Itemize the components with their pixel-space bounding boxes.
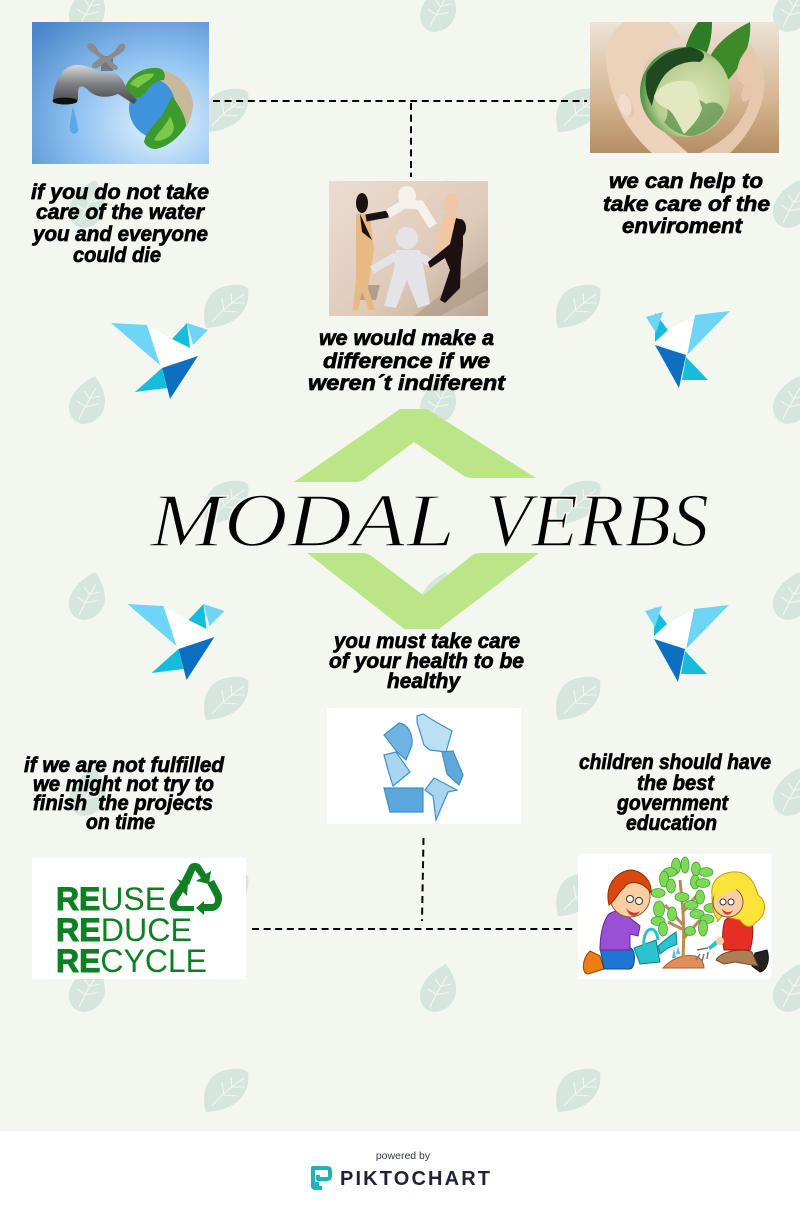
caption: education: [579, 751, 771, 835]
caption: projects: on time: [86, 811, 155, 834]
caption: difference: difference if we: [323, 350, 490, 373]
caption: health: you must take care: [333, 630, 520, 653]
photo: hands holding glass globe: [590, 22, 779, 153]
top dashed connector: [213, 101, 587, 177]
girl: [696, 872, 768, 972]
caption: health: healthy: [387, 670, 461, 693]
reduce line: REDUCE: [56, 912, 192, 948]
bird top right: [646, 311, 730, 388]
reuse line: REUSE: [56, 881, 166, 917]
title: [149, 479, 709, 563]
caption: water: [31, 181, 209, 267]
caption: environment: we can help to: [609, 170, 763, 193]
caption: water: could die: [73, 244, 161, 267]
watering can: [634, 929, 680, 964]
reuse reduce recycle logo: [32, 858, 246, 979]
top arrow: [417, 714, 452, 752]
lower green chevron: [307, 553, 539, 629]
powered by label: powered by: [376, 1150, 431, 1162]
lower left block: [384, 788, 423, 812]
caption: difference: [308, 327, 506, 395]
caption: education: the best: [637, 772, 715, 795]
caption: health: [329, 630, 524, 693]
upper green chevron: [294, 409, 536, 482]
caption: water: care of the water: [36, 201, 206, 224]
footer: [0, 1131, 800, 1211]
caption: environment: [603, 170, 770, 238]
left arrow: [384, 752, 410, 786]
icon: piktochart logo: [313, 1168, 330, 1188]
icon: recycle arrows: [170, 863, 222, 915]
bottom dashed connector: [252, 838, 576, 929]
title: VERBS: [485, 479, 709, 563]
piktochart wordmark: PIKTOCHART: [340, 1168, 490, 1190]
caption: environment: take care of the: [603, 193, 770, 216]
caption: water: if you do not take: [31, 181, 209, 204]
boy: [583, 870, 651, 974]
bird bottom left: [128, 604, 224, 680]
upper left arrow: [384, 723, 412, 760]
title: MODAL: [149, 479, 455, 563]
caption: projects: finish the projects: [33, 792, 213, 815]
caption: health: of your health to be: [329, 650, 524, 673]
caption: projects: we might not try to: [33, 773, 214, 796]
bird top left: [111, 323, 208, 399]
caption: difference: we would make a: [319, 327, 494, 350]
bird bottom right: [645, 605, 729, 682]
caption: environment: enviroment: [622, 215, 743, 238]
recycle line: RECYCLE: [56, 943, 207, 979]
tree: [651, 857, 718, 968]
lower right arrow: [425, 778, 457, 820]
photo: paper people in a circle: [329, 181, 488, 316]
right arrow: [442, 751, 463, 785]
caption: projects: [24, 754, 225, 834]
photo: recycling symbol made of water: [327, 708, 521, 824]
caption: education: children should have: [579, 751, 771, 774]
caption: water: you and everyone: [32, 223, 208, 246]
photo: faucet and globe: [32, 22, 209, 164]
caption: projects: if we are not fulfilled: [24, 754, 225, 777]
caption: difference: weren´t indiferent: [308, 372, 506, 395]
illustration: children planting a tree: [578, 854, 771, 979]
caption: education: education: [626, 812, 717, 835]
caption: education: government: [616, 792, 729, 815]
